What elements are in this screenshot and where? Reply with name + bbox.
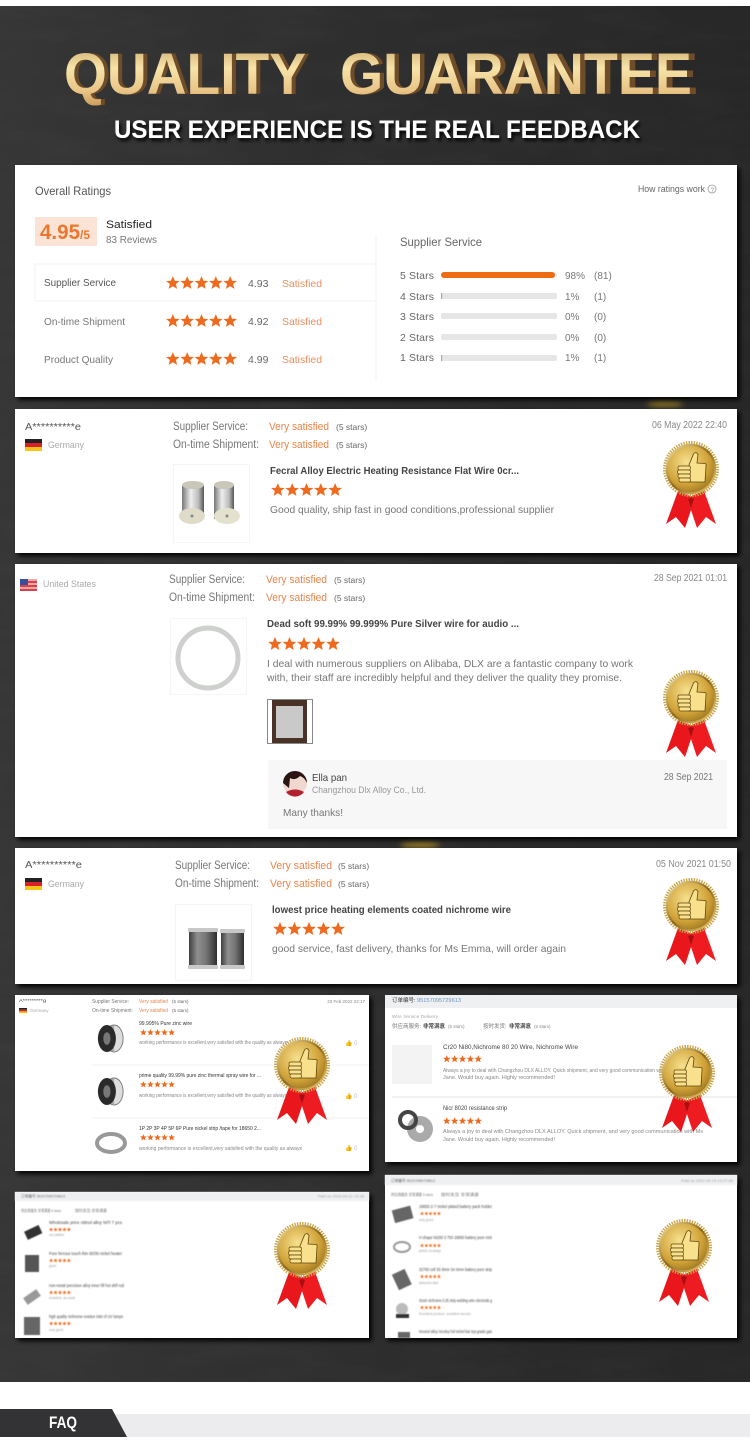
- panel: small review nichrome wire, Chinese: Always a joy to deal with Changzhou DLX ALLOY. Quick shipment, and very good communication with Ms: [443, 1129, 703, 1135]
- panel: small review five products: Paid on 2022-03-19 14:27:48: [681, 1178, 734, 1183]
- panel: small review five products: 按时发货 非常满意: [441, 1191, 479, 1197]
- panel: small review nichrome wire, Chinese: [385, 995, 737, 1162]
- panel: small review four products: 订单编号 95157095729613: [21, 1192, 66, 1198]
- review thumbnail: [268, 700, 312, 744]
- panel: review Germany nichrome wire: Very satisfied: [270, 878, 332, 890]
- bar: 2 stars: 2 Stars: [400, 332, 434, 344]
- icon: gold medal 3: [664, 880, 718, 965]
- panel: small review five products: H shape Ni200 3 750 18650 battery pure nick: [419, 1235, 493, 1240]
- panel: small review zinc wire: (5 stars): [172, 1008, 189, 1013]
- panel: small review zinc wire: 👍 0: [345, 1092, 358, 1100]
- score box: 4.95: [40, 221, 80, 244]
- supplier reply: Ella pan: [312, 772, 347, 784]
- row: on-time shipment: 4.92: [248, 316, 269, 328]
- bar: 4 stars: [400, 291, 606, 303]
- panel: small review four products: Paid on 2022-04-21 10:18: [318, 1194, 365, 1198]
- bar chart: supplier service: Supplier Service: [400, 235, 482, 249]
- panel: small review four products: 供应商服务 非常满意 5 stars: [21, 1207, 61, 1213]
- panel: small review five products: very good: [419, 1218, 433, 1222]
- title: QUALITY: [68, 42, 310, 107]
- panel: review Germany flat wire: (5 stars): [336, 422, 367, 432]
- panel: small review nichrome wire, Chinese: 供应商服务:: [392, 1022, 422, 1030]
- icon: German flag: [25, 878, 42, 890]
- panel: small review zinc wire: On-time Shipment:: [92, 1008, 133, 1014]
- icon: gold medal 6: [276, 1224, 328, 1309]
- product photo: thermal spray wire spool: [98, 1078, 123, 1105]
- panel: review Germany flat wire: Very satisfied: [269, 439, 329, 451]
- score summary: Satisfied: [106, 219, 152, 231]
- row: supplier service: [44, 276, 322, 290]
- supplier reply: Changzhou Dlx Alloy Co., Ltd.: [312, 785, 426, 795]
- title: GUARANTEE: [344, 42, 698, 107]
- panel: small review nichrome wire, Chinese: (5 stars): [534, 1024, 551, 1029]
- panel: review Germany flat wire: Very satisfied: [269, 421, 329, 433]
- bar: 3 stars: [400, 311, 606, 323]
- ratings table: [35, 236, 376, 380]
- title: [64, 42, 698, 107]
- panel: review Germany nichrome wire: Very satisfied: [270, 860, 332, 872]
- panel: review Germany flat wire: Germany: [48, 440, 84, 450]
- panel: review United States silver wire: (5 stars): [334, 575, 365, 585]
- panel: review Germany nichrome wire: Supplier Service:: [175, 860, 250, 872]
- panel: small review zinc wire: working performance is excellent,very satisfied with the quality as always: [139, 1040, 287, 1046]
- bar: 1 stars: (1): [594, 353, 606, 364]
- panel: small review zinc wire: Very satisfied: [139, 1008, 168, 1014]
- panel: small review nichrome wire, Chinese: 订单编号:: [392, 996, 416, 1004]
- title: GUARANTEE: [340, 42, 692, 107]
- how ratings work link: ?: [710, 187, 714, 194]
- panel: review United States silver wire: with, their staff are incredibly helpful and they deliver the quality they promise.: [266, 672, 622, 684]
- title: QUALITY: [64, 42, 306, 107]
- panel: small review zinc wire: [15, 995, 369, 1171]
- icon: German flag: [25, 439, 42, 451]
- panel: review Germany nichrome wire: On-time Shipment:: [175, 878, 259, 890]
- product photo: spools: [174, 464, 250, 542]
- row: supplier service: Supplier Service: [44, 277, 116, 289]
- icon: US flag: [20, 579, 37, 591]
- product photo: zinc wire spool: [98, 1025, 123, 1052]
- panel: small review four products: Pure ferrous touch thin 60/30 nickel heater: [49, 1251, 122, 1256]
- panel: review Germany nichrome wire: lowest price heating elements coated nichrome wire: [272, 904, 511, 916]
- product placeholder image: [392, 1045, 432, 1084]
- panel: small review zinc wire: 👍 0: [345, 1039, 358, 1047]
- panel: review United States silver wire: (5 stars): [334, 593, 365, 603]
- panel: small review zinc wire: (5 stars): [172, 999, 189, 1004]
- panel: small review five products: [385, 1175, 737, 1338]
- panel: small review nichrome wire, Chinese: Cr20 Ni80,Nichrome 80 20 Wire, Nichrome Wire: [443, 1045, 579, 1051]
- panel: small review four products: very satisfied: [49, 1233, 64, 1237]
- panel: small review zinc wire: prime quality 99.99% pure zinc thermal spray wire for ...: [139, 1073, 261, 1079]
- row: product quality: 4.99: [248, 354, 269, 366]
- panel: small review zinc wire: working performance is excellent,very satisfied with the quality as always: [139, 1093, 287, 1099]
- panel: review United States silver wire: Very satisfied: [266, 592, 327, 604]
- bar: 4 stars: 4 Stars: [400, 291, 434, 303]
- panel: small review four products: Wholesale price nitinol alloy NiTi 7 pcs: [49, 1220, 123, 1225]
- panel: review Germany nichrome wire: 05 Nov 2021 01:50: [656, 859, 731, 870]
- panel: small review five products: Stock nichrome 0.25 strip welding wire electrode g: [419, 1298, 492, 1303]
- panel: review Germany nichrome wire: good service, fast delivery, thanks for Ms Emma, will order again: [272, 943, 566, 955]
- bar: 1 stars: [400, 352, 606, 364]
- panel: small review four products: 按时发货 非常满意: [75, 1207, 107, 1213]
- supplier reply: [268, 760, 727, 829]
- row: supplier service: 4.93: [248, 278, 269, 290]
- panel: small review nichrome wire, Chinese: 95157095729613: [417, 998, 461, 1004]
- panel: overall ratings: [15, 165, 737, 397]
- panel: small review five products: 供应商服务 非常满意 5 stars: [391, 1191, 433, 1197]
- panel: small review nichrome wire, Chinese: Wire Service Delivery: [392, 1014, 439, 1019]
- panel: review Germany nichrome wire: Germany: [48, 879, 84, 889]
- bar: 5 stars: 5 Stars: [400, 270, 434, 282]
- icon: gold medal 5: [660, 1046, 714, 1132]
- panel: review Germany flat wire: (5 stars): [336, 440, 367, 450]
- product photo: resistance strip coil: [400, 1112, 433, 1142]
- panel: review United States silver wire: United States: [43, 579, 96, 589]
- panel: small review zinc wire: working performance is excellent,very satisfied with the quality as always: [139, 1146, 302, 1152]
- bar: 1 stars: 1 Stars: [400, 352, 434, 364]
- panel: review Germany flat wire: A**********e: [25, 421, 81, 433]
- score summary: 83 Reviews: [106, 234, 157, 246]
- panel: review Germany nichrome wire: [15, 848, 737, 984]
- panel: small review nichrome wire, Chinese: 非常满意: [423, 1022, 446, 1030]
- bar: 2 stars: [400, 332, 606, 344]
- panel: small review zinc wire: A*********g: [19, 998, 47, 1003]
- panel: review Germany flat wire: On-time Shipment:: [173, 439, 259, 451]
- score box: [35, 217, 97, 246]
- icon: gold medal 4: [276, 1038, 328, 1124]
- panel: small review five products: awesome deal: [419, 1281, 438, 1285]
- panel: small review nichrome wire, Chinese: 非常满意: [509, 1022, 532, 1030]
- subtitle: USER EXPERIENCE IS THE REAL FEEDBACK: [114, 116, 640, 144]
- panel: review Germany flat wire: Good quality, ship fast in good conditions,professional supplier: [270, 504, 554, 516]
- bar chart: supplier service: [400, 235, 612, 364]
- bar: 3 stars: (0): [594, 312, 606, 323]
- icon: gold medal 2: [664, 672, 718, 757]
- panel: small review five products: Excellent product, excellent service: [419, 1312, 471, 1316]
- panel: review United States silver wire: 28 Sep 2021 01:01: [654, 573, 727, 584]
- panel: review United States silver wire: [15, 564, 737, 837]
- panel: small review zinc wire: Supplier Service:: [92, 999, 129, 1005]
- panel: small review five products: 订单编号 95157095729613: [391, 1177, 436, 1183]
- panel: small review four products: non-metal precision alloy inner fill hot drill rod: [49, 1283, 124, 1288]
- panel: small review four products: very good: [49, 1328, 63, 1332]
- supplier reply: 28 Sep 2021: [664, 772, 713, 783]
- panel: review Germany flat wire: 06 May 2022 22:40: [652, 420, 727, 431]
- heading: overall ratings: Overall Ratings: [35, 184, 111, 198]
- panel: small review nichrome wire, Chinese: Nicr 8020 resistance strip: [443, 1106, 508, 1112]
- bar: 2 stars: (0): [594, 333, 606, 344]
- bar: 5 stars: 98%: [565, 271, 585, 282]
- bar: 4 stars: (1): [594, 292, 606, 303]
- panel: small review zinc wire: 23 Feb 2022 22:17: [327, 999, 365, 1004]
- bar: 5 stars: (81): [594, 271, 612, 282]
- bar: 2 stars: 0%: [565, 333, 580, 344]
- panel: small review four products: good: [49, 1264, 56, 1268]
- panel: small review nichrome wire, Chinese: 按时发货:: [483, 1022, 507, 1030]
- panel: review Germany nichrome wire: (5 stars): [338, 861, 369, 871]
- bar: 3 stars: 3 Stars: [400, 311, 434, 323]
- panel: small review zinc wire: Germany: [30, 1008, 49, 1013]
- panel: small review nichrome wire, Chinese: Jane. Would buy again. Highly recommended!: [443, 1137, 555, 1143]
- FAQ band: [0, 1409, 750, 1437]
- row: on-time shipment: Satisfied: [282, 316, 322, 328]
- panel: small review zinc wire: 1P 2P 3P 4P 5P 6P Pure nickel strip /tape for 18650 2...: [139, 1126, 261, 1132]
- score summary: [106, 219, 157, 246]
- panel: review Germany nichrome wire: (5 stars): [338, 879, 369, 889]
- panel: small review five products: 32700 cell 3S 8mm Sn 6mm battery pure strip: [419, 1267, 492, 1272]
- bar: 5 stars: [400, 270, 612, 282]
- supplier reply: Many thanks!: [283, 807, 343, 819]
- panel: review United States silver wire: Dead soft 99.99% 99.999% Pure Silver wire for audio ...: [267, 618, 519, 630]
- panel: review United States silver wire: On-time Shipment:: [169, 592, 255, 604]
- panel: small review nichrome wire, Chinese: Always a joy to deal with Changzhou DLX ALLOY. Quick shipment, and very good communication with Ms: [443, 1068, 673, 1074]
- row: on-time shipment: [44, 314, 322, 328]
- score box: /5: [80, 228, 90, 242]
- panel: review United States silver wire: Supplier Service:: [169, 574, 245, 586]
- panel: review Germany flat wire: [15, 409, 737, 553]
- FAQ heading: FAQ: [49, 1413, 77, 1432]
- panel: small review five products: 18650 2-7 nickel plated battery pack holder: [419, 1204, 492, 1209]
- how ratings work link: How ratings work: [638, 184, 705, 194]
- panel: review Germany flat wire: Supplier Service:: [173, 421, 248, 433]
- panel: small review five products: Inconel alloy Incoloy foil nickel bar top grade gas: [419, 1329, 493, 1334]
- bar: 3 stars: 0%: [565, 312, 580, 323]
- bar: 4 stars: 1%: [565, 292, 580, 303]
- product photo: wire reels: [176, 904, 252, 980]
- panel: small review five products: perfect, as always: [419, 1249, 441, 1253]
- row: supplier service: Satisfied: [282, 278, 322, 290]
- panel: small review four products: excellent, as usual: [49, 1296, 75, 1300]
- panel: review Germany flat wire: Fecral Alloy Electric Heating Resistance Flat Wire 0cr...: [270, 465, 519, 477]
- icon: gold medal 1: [664, 442, 718, 528]
- row: product quality: [44, 352, 322, 366]
- product photo: silver ring: [170, 618, 246, 694]
- panel: small review zinc wire: 99.995% Pure zinc wire: [139, 1021, 192, 1027]
- panel: review United States silver wire: Very satisfied: [266, 574, 327, 586]
- panel: small review four products: high quality nichrome resistor inlet of UV lamps: [49, 1314, 124, 1319]
- row: on-time shipment: On-time Shipment: [44, 316, 125, 328]
- row: product quality: Satisfied: [282, 354, 322, 366]
- icon: gold medal 7: [658, 1220, 710, 1306]
- panel: small review four products: [15, 1192, 369, 1338]
- panel: review Germany nichrome wire: A**********e: [25, 859, 82, 871]
- panel: small review nichrome wire, Chinese: (5 stars): [448, 1024, 465, 1029]
- panel: small review zinc wire: 👍 0: [345, 1144, 358, 1152]
- bar: 1 stars: 1%: [565, 353, 580, 364]
- row: product quality: Product Quality: [44, 354, 114, 366]
- panel: review United States silver wire: I deal with numerous suppliers on Alibaba, DLX are a fantastic company to work: [267, 658, 634, 670]
- panel: small review nichrome wire, Chinese: Jane. Would buy again. Highly recommended!: [443, 1075, 555, 1081]
- icon: avatar: [283, 771, 307, 797]
- panel: small review zinc wire: Very satisfied: [139, 999, 168, 1005]
- product photo: nickel strip coil: [97, 1134, 125, 1152]
